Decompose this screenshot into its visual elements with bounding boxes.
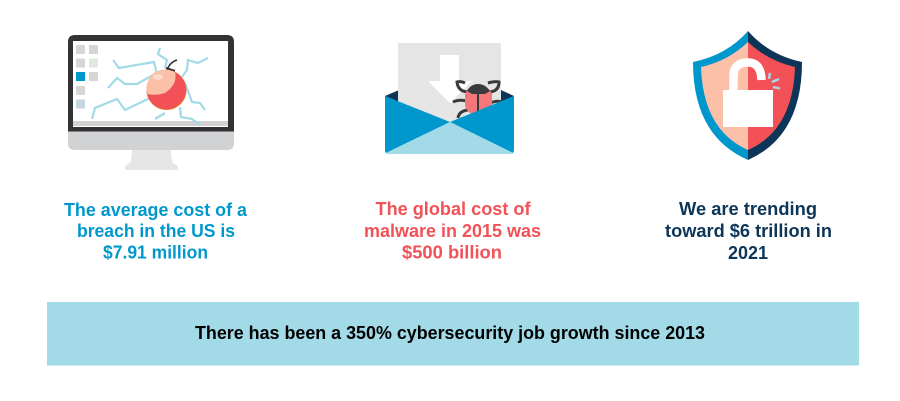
text: average breach cost	[64, 199, 248, 262]
text: trending cost	[665, 198, 832, 263]
banner: job growth	[47, 302, 859, 366]
icon: bug on envelope	[453, 82, 502, 118]
text: average breach cost: The average cost of a	[64, 199, 248, 220]
text: global malware cost: The global cost of	[376, 198, 531, 219]
text: global malware cost: malware in 2015 was	[364, 220, 541, 241]
text: average breach cost: breach in the US is	[77, 220, 235, 241]
text: trending cost: toward $6 trillion in	[665, 220, 832, 241]
banner: job growth: There has been a 350% cybersecurity job growth since 2013	[195, 322, 705, 343]
icon: monitor with bug	[68, 35, 234, 170]
text: average breach cost: $7.91 million	[103, 242, 208, 262]
icon: shield with open padlock	[693, 31, 802, 160]
text: trending cost: 2021	[728, 242, 768, 263]
text: global malware cost	[364, 198, 541, 262]
text: global malware cost: $500 billion	[402, 242, 502, 262]
text: trending cost: We are trending	[679, 198, 817, 219]
icon: envelope with bug	[385, 43, 514, 154]
